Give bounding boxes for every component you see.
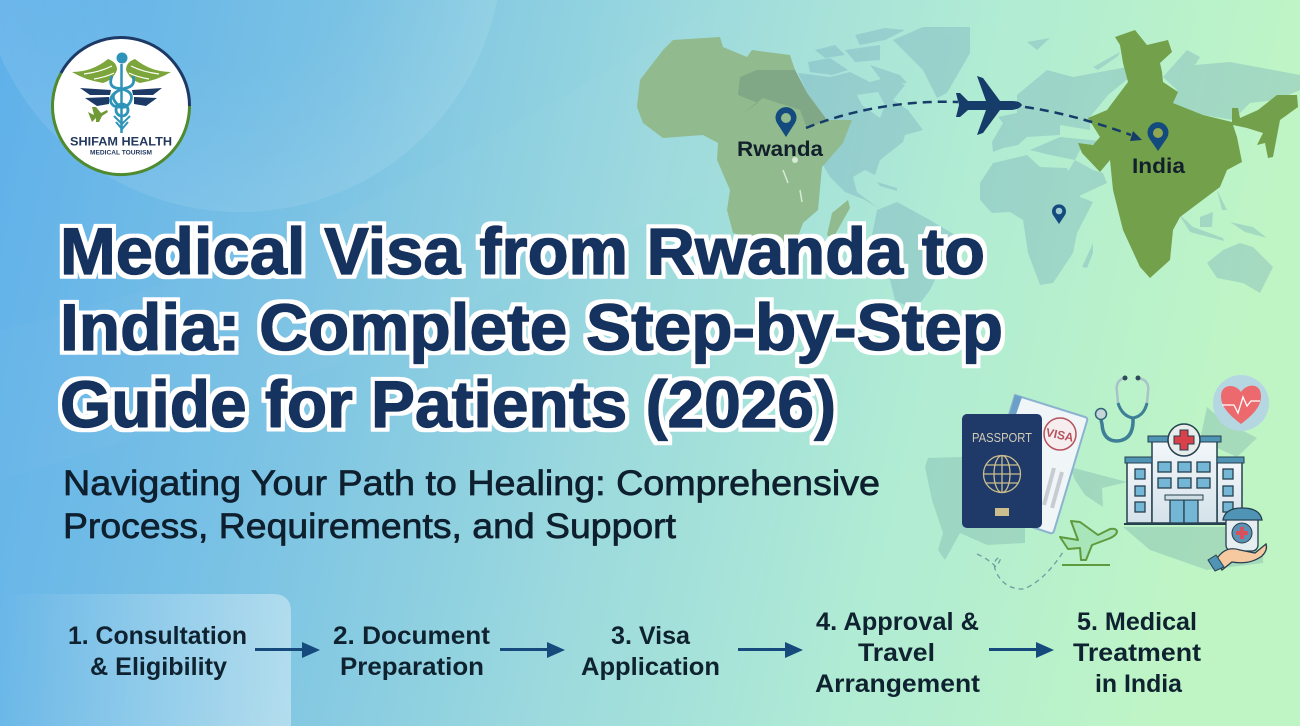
faded island shapes behind icons	[925, 407, 1263, 570]
subtitle	[63, 464, 880, 546]
step 4	[815, 608, 981, 698]
icon: heart bubble	[1213, 375, 1269, 431]
icon: visa paper	[980, 395, 1087, 533]
icon: passport	[962, 414, 1042, 528]
Rwanda label: Rwanda	[737, 138, 823, 161]
step 2: Preparation	[340, 653, 484, 681]
Rwanda pin	[776, 107, 796, 137]
small map pin	[1052, 204, 1066, 224]
icon: passport: PASSPORT	[972, 431, 1032, 445]
route arrowhead	[1130, 131, 1142, 141]
step 5	[1073, 608, 1202, 698]
icon: visa paper: VISA	[1045, 425, 1075, 445]
icon: stethoscope	[1096, 376, 1148, 441]
icon: medicine in hand	[1208, 508, 1266, 571]
title: Medical Visa from Rwanda to	[60, 214, 985, 288]
logo wings	[72, 59, 171, 106]
title: Guide for Patients (2026)	[60, 367, 836, 441]
step 4: Arrangement	[815, 670, 981, 698]
arrow 1 to 2	[255, 642, 320, 658]
step 3	[581, 622, 720, 681]
logo caduceus	[110, 52, 134, 133]
title	[60, 214, 1003, 441]
step 3: 3. Visa	[611, 622, 691, 650]
step 5: 5. Medical	[1077, 608, 1197, 636]
icon: departing plane	[1060, 521, 1117, 565]
India pin	[1148, 122, 1168, 151]
title: India: Complete Step-by-Step	[60, 290, 1003, 364]
world map: faded continents	[798, 27, 1300, 310]
logo tagline: MEDICAL TOURISM	[90, 150, 152, 156]
step 5: Treatment	[1073, 639, 1202, 667]
step 1: 1. Consultation	[68, 622, 247, 650]
arrow 3 to 4	[738, 642, 803, 658]
map: large Africa shape	[637, 37, 852, 250]
step 4: 4. Approval &	[816, 608, 979, 636]
panel: highlighted first step	[0, 594, 291, 726]
flight route dashed	[806, 102, 1131, 135]
step 4: Travel	[858, 639, 935, 667]
arrow 2 to 3	[500, 642, 565, 658]
logo	[53, 38, 190, 175]
logo name: SHIFAM HEALTH	[70, 134, 172, 148]
step 2	[333, 622, 491, 681]
step 1: & Eligibility	[90, 653, 227, 681]
step 3: Application	[581, 653, 720, 681]
India label: India	[1132, 155, 1185, 178]
dashed travel path	[977, 552, 1063, 589]
step 5: in India	[1095, 670, 1183, 698]
step 2: 2. Document	[333, 622, 491, 650]
icon: airplane	[956, 76, 1022, 135]
map: highlighted India	[1078, 30, 1298, 278]
arrow 4 to 5	[989, 642, 1054, 658]
icon: hospital	[1124, 424, 1244, 524]
subtitle: Process, Requirements, and Support	[63, 507, 676, 546]
subtitle: Navigating Your Path to Healing: Comprehensive	[63, 464, 880, 503]
logo plane	[88, 107, 108, 122]
step 1	[68, 622, 247, 681]
